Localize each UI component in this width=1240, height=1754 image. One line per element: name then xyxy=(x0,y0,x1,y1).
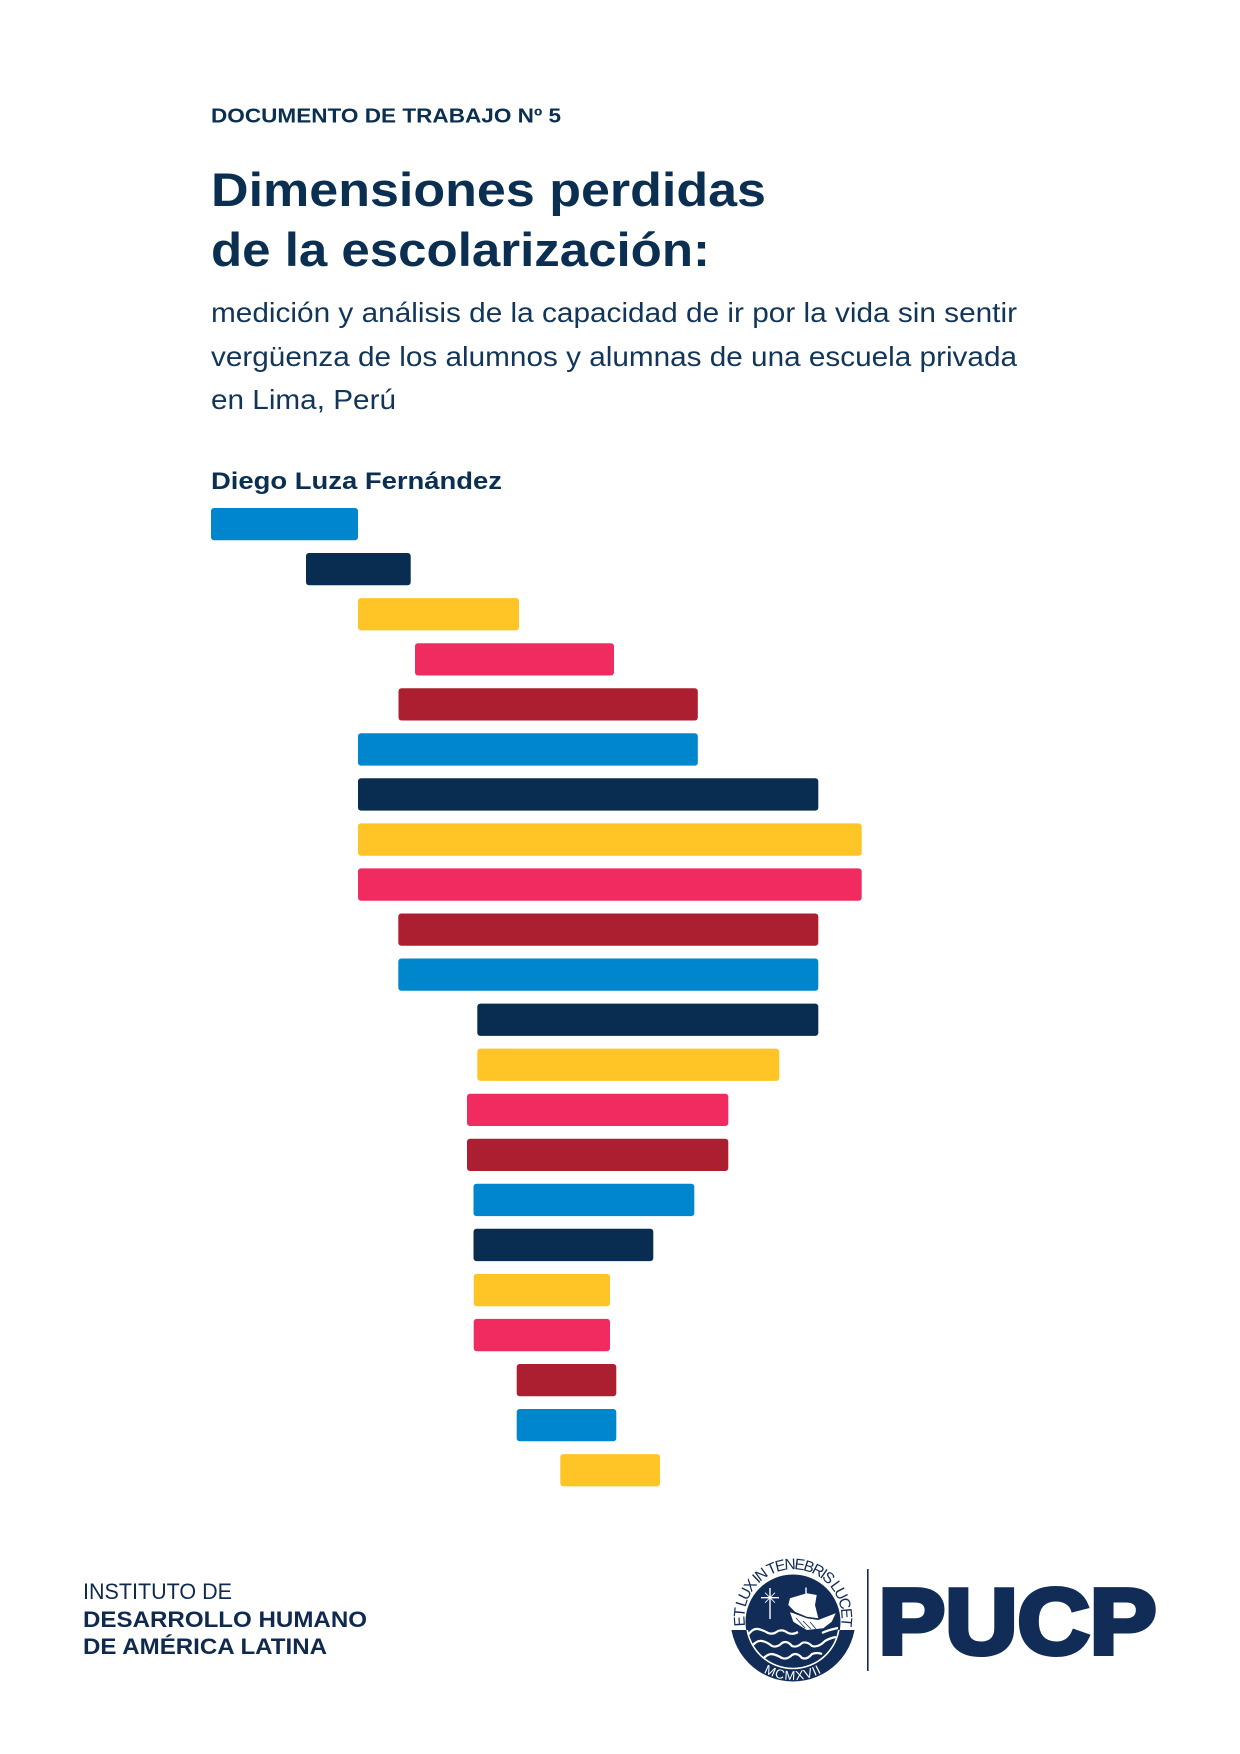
bar 2 xyxy=(306,553,411,585)
bar 11 xyxy=(398,958,818,991)
bar 21 xyxy=(517,1409,616,1441)
bar 13 xyxy=(477,1049,779,1081)
subtitle: vergüenza de los alumnos y alumnas de una escuela privada xyxy=(211,341,1017,372)
subtitle: en Lima, Perú xyxy=(211,384,396,415)
institute name: DESARROLLO HUMANO xyxy=(83,1607,367,1632)
PUCP wordmark: PUCP xyxy=(878,1570,1156,1674)
title xyxy=(211,163,766,276)
institute name xyxy=(83,1579,367,1659)
icon: PUCP emblem xyxy=(732,1558,854,1682)
bar 1 xyxy=(211,508,358,540)
series label: DOCUMENTO DE TRABAJO Nº 5 xyxy=(211,106,561,128)
bar 9 xyxy=(358,868,862,901)
divider between emblem and wordmark xyxy=(867,1569,869,1671)
institute name: DE AMÉRICA LATINA xyxy=(83,1634,327,1659)
bar 17 xyxy=(474,1229,653,1261)
map of Latin America made of coloured bars xyxy=(211,508,862,1486)
bar 19 xyxy=(474,1319,610,1351)
bar 6 xyxy=(358,733,698,766)
bar 4 xyxy=(415,643,614,676)
bar 14 xyxy=(467,1094,728,1126)
author: Diego Luza Fernández xyxy=(211,468,502,495)
subtitle: medición y análisis de la capacidad de ir por la vida sin sentir xyxy=(211,297,1017,328)
bar 22 xyxy=(560,1454,660,1486)
icon: PUCP emblem: ET LUX IN TENEBRIS LUCET xyxy=(734,1558,852,1628)
title: Dimensiones perdidas xyxy=(211,163,766,216)
bar 5 xyxy=(398,688,698,720)
bar 8 xyxy=(358,823,862,856)
institute name: INSTITUTO DE xyxy=(83,1579,232,1604)
subtitle xyxy=(211,297,1017,415)
bar 15 xyxy=(467,1139,728,1171)
bar 3 xyxy=(358,598,519,630)
bar 7 xyxy=(358,778,818,811)
bar 12 xyxy=(477,1004,818,1036)
icon: PUCP emblem: MCMXVII xyxy=(764,1664,820,1680)
title: de la escolarización: xyxy=(211,223,710,276)
bar 10 xyxy=(398,914,818,946)
bar 18 xyxy=(474,1274,610,1306)
bar 20 xyxy=(517,1364,616,1396)
bar 16 xyxy=(474,1184,694,1216)
